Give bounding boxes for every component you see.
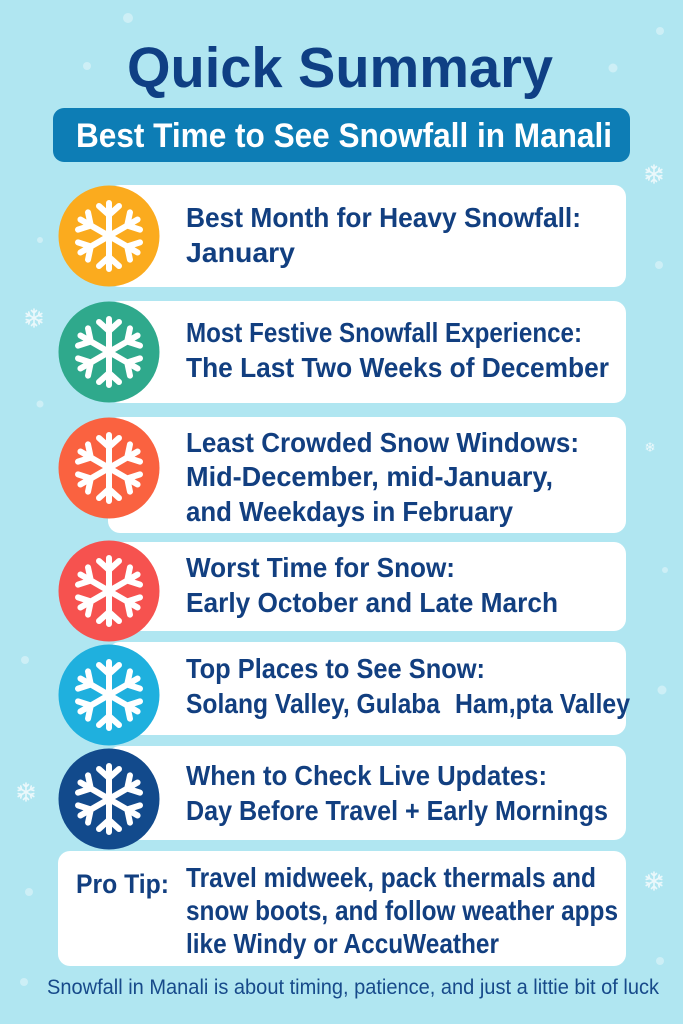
text: live updates: When to Check Live Updates:	[186, 760, 547, 791]
text: top places: Solang Valley, Gulaba	[186, 688, 440, 719]
pro tip text: Travel midweek, pack thermals and	[186, 862, 596, 893]
text: most festive: Most Festive Snowfall Experience:	[186, 317, 582, 348]
panel: live updates	[58, 746, 626, 850]
text: most festive	[186, 317, 609, 383]
icon: snowflake sky blue	[58, 644, 160, 746]
subtitle banner	[53, 108, 630, 162]
title: Quick Summary	[127, 36, 553, 100]
text: top places	[186, 653, 630, 719]
text: top places: Top Places to See Snow:	[186, 653, 485, 684]
panel: least crowded	[58, 417, 626, 533]
text: worst time: Early October and Late March	[186, 587, 558, 618]
footer text: Snowfall in Manali is about timing, patience, and just a littie bit of luck	[47, 976, 659, 999]
text: top places: Ham,pta Valley	[455, 688, 630, 719]
text: least crowded	[186, 427, 579, 527]
panel: worst time	[58, 540, 626, 642]
text: live updates	[186, 760, 608, 826]
subtitle text: Best Time to See Snowfall in Manali	[76, 117, 612, 155]
text: least crowded: Mid-December, mid-January,	[186, 461, 553, 492]
icon: snowflake amber	[58, 186, 160, 286]
pro tip text	[186, 862, 618, 959]
panel: pro tip	[58, 851, 626, 966]
text: best month: Best Month for Heavy Snowfall:	[186, 202, 581, 233]
text: least crowded: and Weekdays in February	[186, 496, 513, 527]
text: least crowded: Least Crowded Snow Windows:	[186, 427, 579, 458]
text: worst time	[186, 552, 558, 618]
text: best month	[186, 202, 581, 268]
icon: snowflake navy	[58, 748, 160, 850]
panel: best month	[58, 185, 626, 287]
pro tip text: snow boots, and follow weather apps	[186, 895, 618, 926]
icon: snowflake green	[58, 302, 160, 402]
text: most festive: The Last Two Weeks of December	[186, 352, 609, 383]
icon: snowflake red	[58, 540, 160, 642]
panel: top places	[58, 642, 630, 746]
icon: snowflake orange-red	[58, 418, 160, 518]
panel: most festive	[58, 301, 626, 403]
text: live updates: Day Before Travel + Early Mornings	[186, 795, 608, 826]
text: best month: January	[186, 237, 295, 268]
pro tip text: like Windy or AccuWeather	[186, 928, 499, 959]
text: worst time: Worst Time for Snow:	[186, 552, 455, 583]
pro tip label: Pro Tip:	[76, 869, 169, 899]
